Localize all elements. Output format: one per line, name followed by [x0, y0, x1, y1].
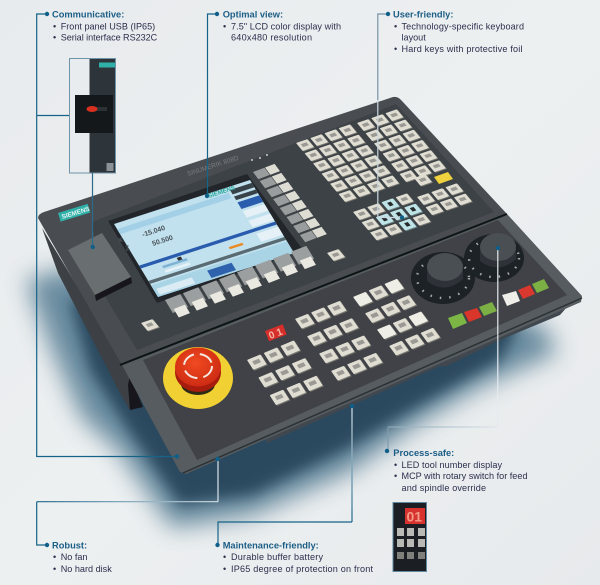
detail keys	[397, 528, 425, 547]
text: maintenance-friendly: •	[223, 564, 226, 574]
leader: optimal view	[208, 14, 217, 196]
control panel device	[38, 97, 582, 474]
text: user-friendly	[393, 10, 524, 54]
LCD screen	[108, 174, 303, 303]
text: robust: Robust:	[52, 540, 87, 550]
LED tool number display: 0 1	[267, 327, 285, 342]
upper panel face	[92, 104, 494, 350]
text: optimal view: •	[223, 22, 226, 32]
SINUMERIK product name: SINUMERIK 808D	[186, 155, 240, 178]
text: user-friendly: Technology-specific keyboard	[402, 22, 524, 32]
text: process-safe: Process-safe:	[393, 448, 454, 458]
inset SIEMENS label	[99, 62, 115, 68]
text: process-safe: LED tool number display	[402, 460, 502, 470]
panel rear bracket	[128, 375, 143, 410]
function keypad	[417, 183, 473, 216]
leader end dots	[45, 12, 500, 547]
detail LED display: 01	[406, 508, 422, 524]
leader: robust horizontal	[37, 501, 218, 503]
leader: user-friendly inner	[378, 100, 402, 218]
page-up key	[327, 249, 346, 262]
inset USB connector	[86, 106, 107, 112]
text: communicative	[52, 10, 158, 42]
machine control keys group 1	[247, 340, 324, 406]
text: communicative: Serial interface RS232C	[61, 32, 158, 42]
panel lower edge highlight	[183, 298, 582, 473]
detail lower keys	[397, 552, 425, 559]
yellow help key	[434, 172, 453, 184]
inset front panel strip	[90, 59, 115, 172]
USB detail inset	[70, 58, 116, 173]
spindle override rotary switch	[464, 233, 524, 282]
text: process-safe	[393, 448, 528, 493]
spindle and feed coloured keys	[448, 279, 549, 329]
inset grey marker	[106, 163, 114, 171]
text: optimal view: Optimal view:	[223, 10, 283, 20]
panel divider gap	[120, 214, 507, 365]
leader: process-safe lower	[387, 427, 389, 451]
text: user-friendly: User-friendly:	[393, 10, 453, 20]
leader: user-friendly outer	[378, 14, 388, 100]
SIEMENS logo label: SIEMENS	[61, 206, 91, 221]
text: robust: No hard disk	[61, 564, 112, 574]
LED tool number display	[265, 324, 287, 343]
cursor keypad	[353, 193, 432, 241]
lower panel housing	[122, 214, 582, 474]
screen position values	[117, 225, 174, 253]
dark inner drop shadow	[70, 300, 520, 505]
soft outer drop shadow	[26, 270, 558, 528]
text: optimal view: 640x480 resolution	[231, 32, 312, 42]
text: communicative: •	[53, 22, 56, 32]
leader: maintenance lower	[218, 522, 352, 545]
text: maintenance-friendly: IP65 degree of protection on front	[231, 564, 373, 574]
text: robust: •	[53, 552, 56, 562]
right numeric keypad	[357, 109, 447, 183]
text: process-safe: •	[394, 471, 397, 481]
screen position values: -15.040	[141, 225, 166, 239]
text: user-friendly: Hard keys with protective foil	[402, 44, 522, 54]
text: communicative: Front panel USB (IP65)	[61, 22, 155, 32]
screen position values: Z	[124, 245, 131, 253]
text: maintenance-friendly: •	[223, 552, 226, 562]
leader lines	[37, 14, 498, 545]
leader: process-safe horizontal	[388, 426, 498, 428]
text: robust: •	[53, 564, 56, 574]
feed override rotary switch	[411, 252, 475, 304]
upper panel housing	[38, 97, 507, 365]
machine control keys group 3	[353, 279, 441, 357]
softkeys below screen	[165, 246, 317, 318]
emergency stop button	[163, 347, 233, 409]
leader: maintenance vertical	[351, 406, 353, 522]
text: communicative: Communicative:	[52, 10, 124, 20]
inset open USB flap	[75, 95, 113, 133]
text: optimal view: 7.5" LCD color display with	[231, 22, 341, 32]
leader: communicative	[37, 14, 177, 456]
panel lower lip	[262, 298, 575, 443]
screen position values: X	[117, 237, 124, 245]
leader: process-safe vertical	[497, 248, 499, 427]
function key above help	[414, 174, 433, 187]
indicator LEDs	[251, 154, 268, 161]
page-left key	[141, 319, 160, 332]
machine control keys group 2	[295, 301, 384, 382]
leader: robust lower	[37, 502, 47, 545]
text: optimal view	[223, 10, 341, 42]
text: maintenance-friendly	[223, 540, 373, 574]
process-safe MCP detail image	[393, 502, 426, 572]
text: robust	[52, 540, 112, 574]
text: maintenance-friendly: Durable buffer battery	[231, 552, 323, 562]
text: maintenance-friendly: Maintenance-friendly:	[223, 540, 319, 550]
text: process-safe: MCP with rotary switch for feed	[402, 471, 528, 481]
panel rear body	[42, 228, 143, 410]
text: user-friendly: •	[394, 44, 397, 54]
text: user-friendly: •	[394, 22, 397, 32]
leader: USB inset to flap	[92, 173, 94, 247]
text: robust: No fan	[61, 552, 87, 562]
text: communicative: •	[53, 32, 56, 42]
text: user-friendly: layout	[402, 32, 426, 42]
left alphabetic keypad	[296, 124, 400, 203]
lower panel face	[143, 220, 567, 460]
USB flap	[68, 233, 132, 301]
softkeys right of screen	[253, 164, 327, 242]
leader: robust vertical	[217, 460, 219, 502]
screen SIEMENS logo: SIEMENS	[207, 185, 236, 200]
text: process-safe: and spindle override	[402, 483, 486, 493]
screen position values: 50.500	[151, 235, 174, 248]
text: process-safe: •	[394, 460, 397, 470]
